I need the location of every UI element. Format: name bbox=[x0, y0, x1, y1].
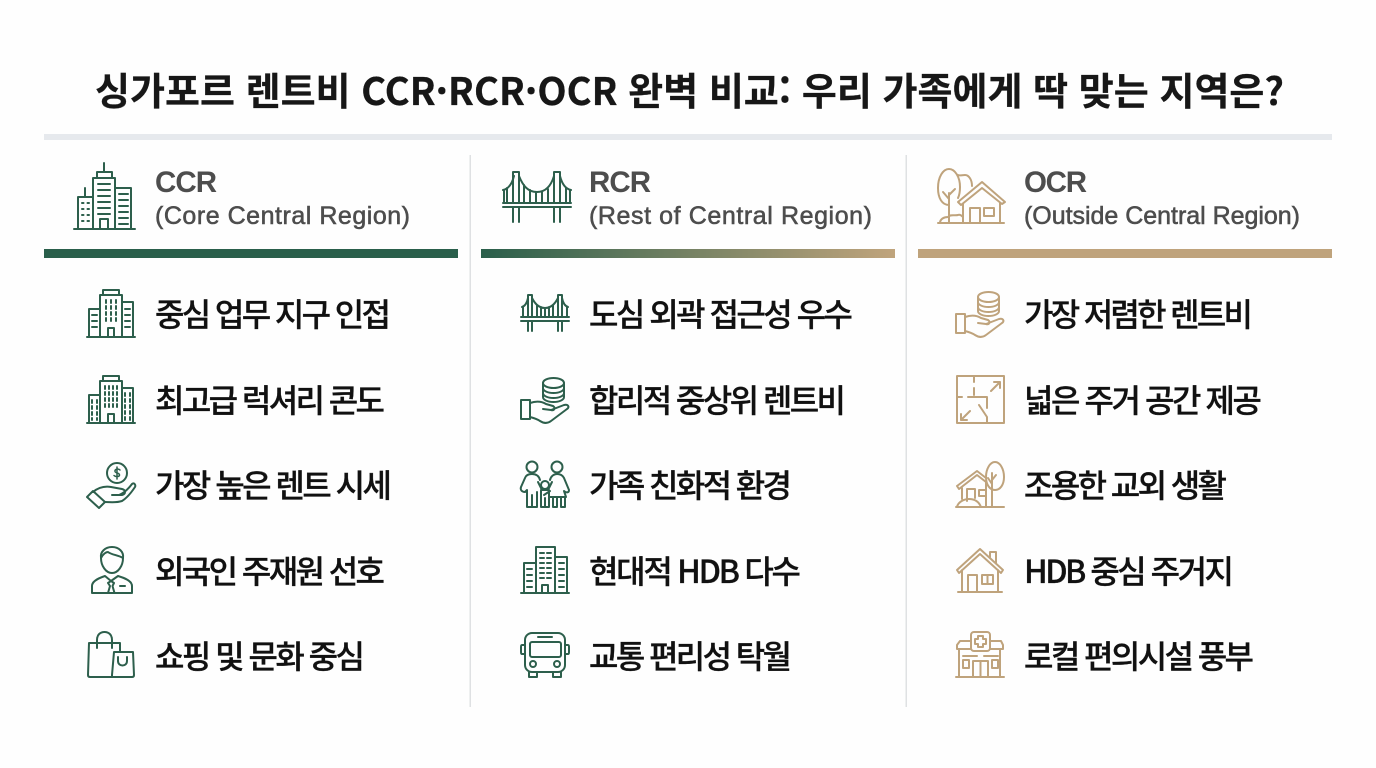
item: 넓은 주거 공간 제공: 넓은 주거 공간 제공 bbox=[1024, 376, 1262, 422]
icon: CCR skyline bbox=[74, 163, 135, 229]
heading: RCR bbox=[589, 166, 872, 230]
panel: RCR bbox=[481, 166, 895, 678]
item: 도심 외곽 접근성 우수: 도심 외곽 접근성 우수 bbox=[589, 290, 853, 336]
item: 로컬 편의시설 풍부: 로컬 편의시설 풍부 bbox=[1024, 632, 1254, 678]
item: HDB 중심 주거지: HDB 중심 주거지 bbox=[1024, 547, 1234, 593]
item: 가장 저렴한 렌트비: 가장 저렴한 렌트비 bbox=[1024, 290, 1253, 336]
item: 중심 업무 지구 인접: 중심 업무 지구 인접 bbox=[155, 290, 391, 336]
panel: OCR bbox=[918, 166, 1332, 678]
heading: CCR: CCR bbox=[155, 166, 217, 199]
icon: RCR suspension bridge bbox=[503, 172, 571, 222]
item: 합리적 중상위 렌트비: 합리적 중상위 렌트비 bbox=[589, 376, 846, 422]
heading: RCR: (Rest of Central Region) bbox=[589, 202, 872, 230]
item: 교통 편리성 탁월: 교통 편리성 탁월 bbox=[589, 632, 792, 678]
heading: OCR bbox=[1024, 166, 1300, 230]
item: 가족 친화적 환경: 가족 친화적 환경 bbox=[589, 461, 792, 507]
panel: CCR bbox=[44, 163, 458, 678]
item: 외국인 주재원 선호: 외국인 주재원 선호 bbox=[155, 547, 385, 593]
heading: OCR: OCR bbox=[1024, 166, 1087, 199]
heading: CCR bbox=[155, 166, 410, 230]
item: 조용한 교외 생활: 조용한 교외 생활 bbox=[1024, 461, 1227, 507]
title: 싱가포르 렌트비 CCR·RCR·OCR 완벽 비교: 우리 가족에게 딱 맞는 지역은? bbox=[95, 61, 1284, 116]
item: 가장 높은 렌트 시세: 가장 높은 렌트 시세 bbox=[155, 461, 392, 507]
item: 최고급 럭셔리 콘도: 최고급 럭셔리 콘도 bbox=[155, 376, 385, 422]
heading: OCR: (Outside Central Region) bbox=[1024, 202, 1300, 230]
icon: OCR house and trees bbox=[938, 169, 1005, 223]
item: 쇼핑 및 문화 중심: 쇼핑 및 문화 중심 bbox=[155, 632, 365, 678]
heading: RCR: RCR bbox=[589, 166, 651, 199]
item: 현대적 HDB 다수: 현대적 HDB 다수 bbox=[589, 547, 801, 593]
heading: CCR: (Core Central Region) bbox=[155, 202, 410, 230]
